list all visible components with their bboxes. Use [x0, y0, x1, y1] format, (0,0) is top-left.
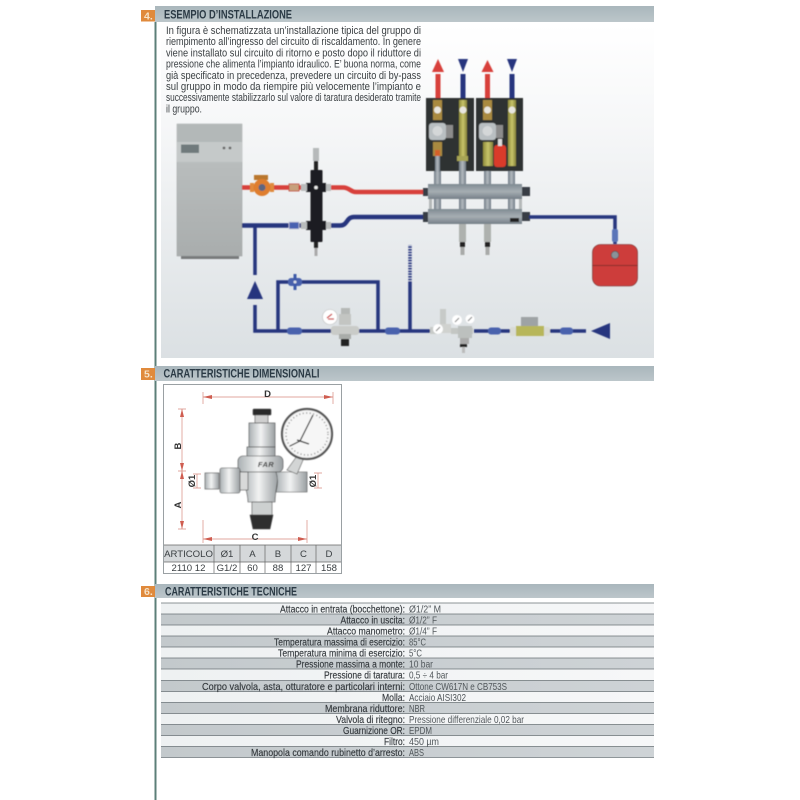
- icon: tank valve: [612, 229, 618, 242]
- dimension table: G1/2: [217, 563, 237, 574]
- specification table: Valvola di ritegno:: [336, 715, 405, 726]
- dimension table: 158: [321, 563, 337, 574]
- specification table: Manopola comando rubinetto d’arresto:: [251, 748, 405, 759]
- intro text block: [166, 25, 421, 115]
- intro text block: il gruppo.: [166, 103, 202, 115]
- icon: pressure reducer: [322, 308, 359, 346]
- intro text block: già specificato in precedenza, prevedere un circuito di by-pass: [166, 70, 421, 82]
- specification table: Temperatura massima di esercizio:: [274, 637, 405, 648]
- icon: filling group: [430, 309, 474, 353]
- dimension table: 127: [295, 563, 312, 574]
- icon: circulator pump: [250, 175, 274, 196]
- dimension letters: [173, 389, 319, 543]
- icon: boiler: [177, 124, 242, 259]
- dimension table: A: [249, 549, 256, 560]
- specification table: Filtro:: [384, 737, 405, 748]
- section 6 heading: 6.: [144, 586, 153, 598]
- specification table: 85°C: [409, 637, 426, 648]
- diagram background panel: [161, 24, 654, 358]
- specification table: Attacco in uscita:: [340, 615, 405, 626]
- dimension table: Ø1: [221, 549, 233, 560]
- section 4 heading: 4.: [144, 10, 153, 22]
- icon: hydraulic separator: [301, 148, 331, 256]
- specification table: 5°C: [409, 648, 422, 659]
- intro text block: In figura è schematizzata un’installazione tipica del gruppo di: [166, 25, 421, 37]
- section 5 heading: CARATTERISTICHE DIMENSIONALI: [164, 368, 320, 380]
- specification table: [161, 603, 654, 759]
- specification table: 0,5 ÷ 4 bar: [409, 670, 448, 681]
- fill circuit pipes: [255, 225, 430, 331]
- panel: dimensional drawing and table: [164, 384, 342, 574]
- specification table: Pressione differenziale 0,02 bar: [409, 715, 524, 726]
- arrow: up flow: [247, 281, 263, 299]
- icon: cold side valve: [289, 222, 299, 229]
- hot supply pipe: [242, 188, 426, 192]
- specification table: ABS: [409, 748, 424, 759]
- intro text block: pressione che alimenta l’impianto idraulico. E’ buona norma, come: [166, 59, 421, 71]
- section 6 heading: CARATTERISTICHE TECNICHE: [165, 586, 297, 598]
- dimension letters: C: [252, 532, 259, 543]
- icon: expansion tank: [592, 244, 638, 286]
- specification table: Corpo valvola, asta, otturatore e particolari interni:: [202, 682, 405, 693]
- dimension arrowheads: [180, 395, 333, 541]
- specification table: Ø1/2” F: [409, 615, 437, 626]
- specification table: Guarnizione OR:: [343, 726, 405, 737]
- dimension letters: B: [173, 442, 184, 449]
- specification table: Pressione di taratura:: [324, 670, 405, 681]
- dimension table: 60: [247, 563, 258, 574]
- specification table: Attacco in entrata (bocchettone):: [280, 604, 405, 615]
- dimension table: D: [326, 549, 333, 560]
- dimension letters: D: [264, 389, 271, 400]
- section 4 heading: [141, 6, 654, 22]
- section 5 heading: [141, 366, 654, 381]
- specification table: Molla:: [382, 693, 405, 704]
- specification table: EPDM: [409, 726, 432, 737]
- intro text block: viene installato sul circuito di ritorno e posto dopo il riduttore di: [166, 47, 421, 59]
- icon: pressure reducer with gauge: FAR: [258, 460, 274, 469]
- left vertical rule: [154, 22, 156, 800]
- expansion tank pipe: [529, 217, 615, 244]
- cold return pipe: [242, 217, 426, 226]
- dimension table: 88: [273, 563, 283, 574]
- specification table: Ottone CW617N e CB753S: [409, 682, 507, 693]
- section 5 heading: 5.: [144, 368, 153, 380]
- specification table: Attacco manometro:: [327, 626, 405, 637]
- specification table: Acciaio AISI302: [409, 693, 466, 704]
- specification table: Ø1/2” M: [409, 604, 441, 615]
- icon: by-pass valve: [288, 274, 302, 290]
- dimension table: ARTICOLO: [164, 549, 213, 560]
- specification table: Membrana riduttore:: [325, 704, 405, 715]
- arrows: circuit flow: [432, 59, 517, 100]
- dimension table: C: [300, 549, 307, 560]
- specification table: 10 bar: [409, 659, 433, 670]
- specification table: NBR: [409, 704, 425, 715]
- specification table: Ø1/4” F: [409, 626, 437, 637]
- installation schematic: [177, 59, 638, 353]
- icon: water meter: [510, 317, 550, 336]
- specification table: Pressione massima a monte:: [296, 659, 405, 670]
- specification table: Temperatura minima di esercizio:: [278, 648, 405, 659]
- section 6 heading: [141, 584, 654, 598]
- intro text block: sul gruppo in modo da riempire più velocemente l’impianto e: [166, 81, 421, 93]
- dimension letters: Ø1: [308, 474, 319, 487]
- icon: pressure reducer with gauge: [205, 409, 332, 529]
- icon: hot side valve: [289, 184, 299, 191]
- dimension table: [164, 545, 341, 574]
- icon: manifold with pump panels: [423, 59, 530, 255]
- expansion column, dashed: [408, 245, 412, 283]
- dimension letters: A: [173, 501, 184, 508]
- intro text block: successivamente stabilizzarlo sul valore di taratura desiderato tramite: [166, 92, 421, 104]
- dimension table: B: [275, 549, 281, 560]
- section 4 heading: ESEMPIO D’INSTALLAZIONE: [164, 10, 292, 22]
- dimension table: 2110 12: [172, 563, 205, 574]
- icon: line valves: [287, 328, 573, 334]
- arrow: inlet flow: [591, 323, 610, 339]
- specification table: 450 µm: [409, 737, 439, 748]
- intro text block: riempimento all’ingresso del circuito di riscaldamento. In genere: [166, 36, 421, 48]
- dimension lines: [178, 392, 333, 543]
- dimension letters: Ø1: [187, 474, 198, 487]
